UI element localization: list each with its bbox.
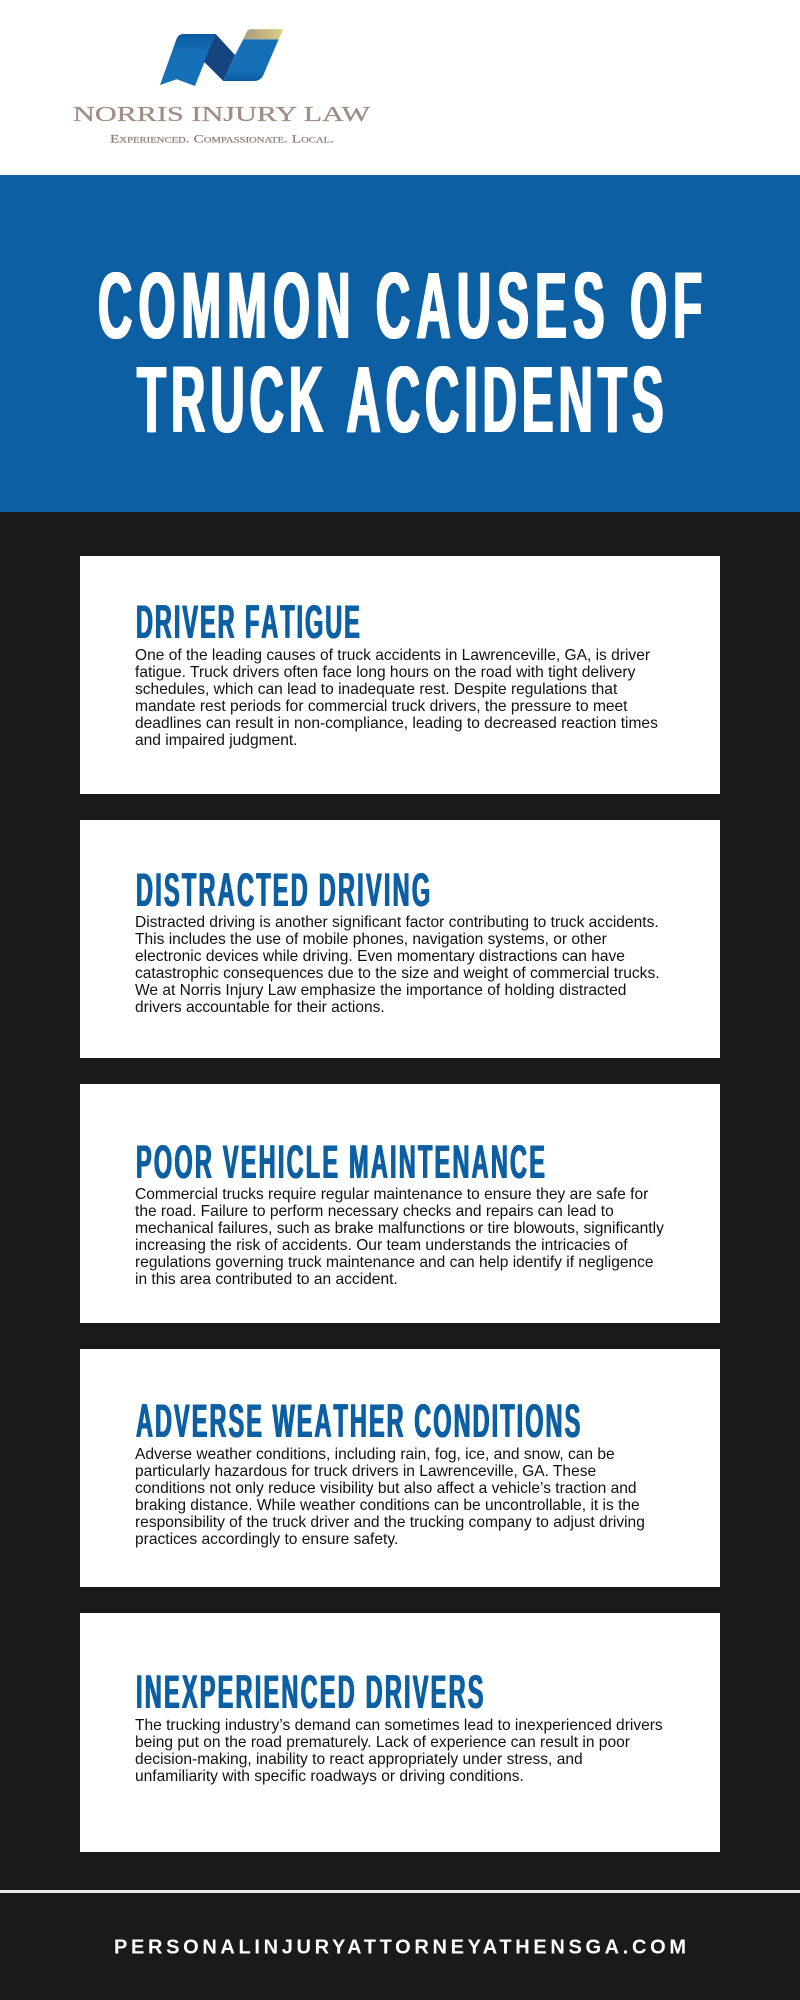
text: distracted driving	[135, 914, 660, 1016]
heading: inexperienced drivers: INEXPERIENCED DRIVERS	[136, 1664, 485, 1718]
text: driver fatigue	[135, 647, 658, 749]
text: driver fatigue: fatigue. Truck drivers often face long hours on the road with tight delivery	[135, 664, 635, 681]
text: distracted driving: This includes the use of mobile phones, navigation systems, or other	[135, 931, 607, 948]
text: distracted driving: drivers accountable for their actions.	[135, 999, 385, 1016]
text: adverse weather conditions: particularly hazardous for truck drivers in Lawrenceville, GA. These	[135, 1462, 596, 1480]
text: driver fatigue: mandate rest periods for commercial truck drivers, the pressure to meet	[135, 698, 628, 715]
text: distracted driving: Distracted driving is another significant factor contributing to truck accidents.	[135, 914, 659, 931]
text: distracted driving: electronic devices while driving. Even momentary distractions can have	[135, 948, 625, 965]
text: adverse weather conditions: Adverse weather conditions, including rain, fog, ice, and snow, can be	[135, 1446, 615, 1462]
text: driver fatigue: deadlines can result in non-compliance, leading to decreased reaction times	[135, 715, 658, 732]
text: inexperienced drivers	[135, 1717, 663, 1785]
text: poor vehicle maintenance: the road. Failure to perform necessary checks and repairs can lead to	[135, 1202, 614, 1220]
text: adverse weather conditions: braking distance. While weather conditions can be uncontrollable, it is the	[135, 1496, 640, 1514]
text: adverse weather conditions	[135, 1446, 645, 1548]
text: inexperienced drivers: The trucking industry’s demand can sometimes lead to inexperienced drivers	[135, 1717, 663, 1734]
title banner	[0, 175, 800, 512]
heading: distracted driving: DISTRACTED DRIVING	[136, 863, 432, 916]
text: distracted driving: We at Norris Injury Law emphasize the importance of holding distracted	[135, 982, 626, 999]
panel: poor vehicle maintenance	[80, 1084, 720, 1323]
panel: driver fatigue	[80, 556, 720, 794]
text: poor vehicle maintenance	[135, 1186, 664, 1288]
text: distracted driving: catastrophic consequences due to the size and weight of commercial trucks.	[135, 965, 660, 982]
heading: poor vehicle maintenance: POOR VEHICLE MAINTENANCE	[136, 1135, 547, 1188]
title	[98, 253, 708, 453]
text: adverse weather conditions: conditions not only reduce visibility but also affect a vehicle’s traction and	[135, 1480, 637, 1496]
text: inexperienced drivers: decision-making, inability to react appropriately under stress, and	[135, 1751, 583, 1768]
panel: inexperienced drivers	[80, 1613, 720, 1852]
heading: adverse weather conditions: ADVERSE WEATHER CONDITIONS	[136, 1394, 582, 1447]
text: poor vehicle maintenance: increasing the risk of accidents. Our team understands the intricacies of	[135, 1236, 628, 1254]
text: inexperienced drivers: unfamiliarity with specific roadways or driving conditions.	[135, 1768, 524, 1785]
panel: adverse weather conditions	[80, 1349, 720, 1587]
text: adverse weather conditions: responsibility of the truck driver and the trucking company to adjust driving	[135, 1514, 645, 1530]
text: inexperienced drivers: being put on the road prematurely. Lack of experience can result in poor	[135, 1734, 630, 1751]
panel: distracted driving	[80, 820, 720, 1058]
text: driver fatigue: and impaired judgment.	[135, 732, 297, 749]
title: TRUCK ACCIDENTS	[136, 347, 668, 453]
logo: Norris Injury Law	[73, 29, 370, 146]
logo: Norris Injury Law: Experienced. Compassionate. Local.	[110, 134, 334, 146]
logo header	[0, 0, 800, 175]
logo: Norris Injury Law: NORRIS INJURY LAW	[73, 102, 370, 126]
heading: driver fatigue: DRIVER FATIGUE	[136, 595, 361, 648]
text: poor vehicle maintenance: regulations governing truck maintenance and can help identify if negligence	[135, 1254, 654, 1270]
text: poor vehicle maintenance: mechanical failures, such as brake malfunctions or tire blowouts, significantly	[135, 1220, 664, 1236]
title: COMMON CAUSES OF	[98, 253, 708, 359]
footer website: PERSONALINJURYATTORNEYATHENSGA.COM	[114, 1936, 686, 1958]
text: adverse weather conditions: practices accordingly to ensure safety.	[135, 1530, 398, 1548]
text: poor vehicle maintenance: in this area contributed to an accident.	[135, 1270, 398, 1288]
text: driver fatigue: schedules, which can lead to inadequate rest. Despite regulations that	[135, 681, 617, 698]
text: poor vehicle maintenance: Commercial trucks require regular maintenance to ensure they are safe for	[135, 1186, 648, 1202]
text: driver fatigue: One of the leading causes of truck accidents in Lawrenceville, GA, is driver	[135, 647, 650, 664]
